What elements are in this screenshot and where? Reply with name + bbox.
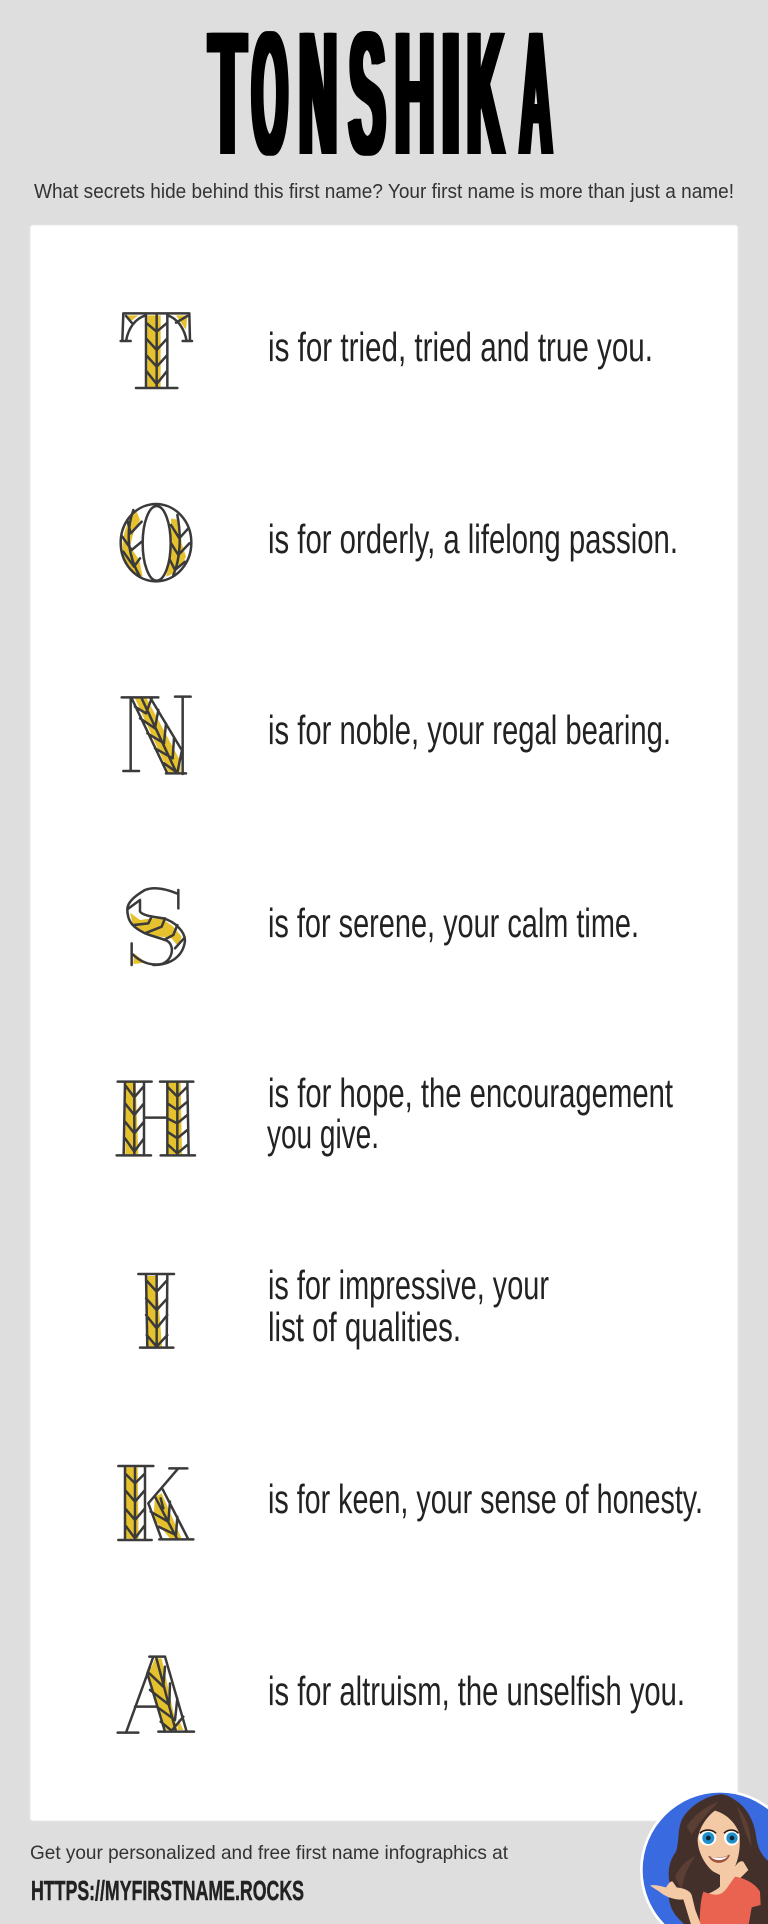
subtitle: What secrets hide behind this first name? Your first name is more than just a name! xyxy=(34,180,734,203)
row O icon xyxy=(121,504,191,581)
row A icon xyxy=(118,1657,194,1733)
title: K xyxy=(467,0,504,192)
icon: avatar xyxy=(640,1790,768,1924)
title: I xyxy=(441,0,461,192)
row K icon xyxy=(118,1466,193,1540)
row I text: list of qualities. xyxy=(268,1304,461,1350)
row I icon xyxy=(138,1274,174,1348)
title: N xyxy=(299,0,337,192)
title: S xyxy=(349,0,385,192)
panel: letter meanings card xyxy=(30,225,738,1821)
row N icon xyxy=(122,697,191,774)
title: T xyxy=(208,0,246,192)
row H text: you give. xyxy=(267,1111,379,1157)
row H text xyxy=(267,1070,673,1157)
row S icon xyxy=(127,888,185,965)
title: H xyxy=(395,0,435,192)
row T icon xyxy=(121,313,192,388)
row H icon xyxy=(117,1082,195,1155)
row I text: is for impressive, your xyxy=(268,1262,549,1308)
title: A xyxy=(520,0,552,192)
footer prompt: Get your personalized and free first name infographics at xyxy=(30,1842,509,1864)
footer url: HTTPS://MYFIRSTNAME.ROCKS xyxy=(31,1875,304,1906)
title: O xyxy=(252,0,288,192)
row I text xyxy=(268,1262,549,1350)
title xyxy=(206,0,554,192)
